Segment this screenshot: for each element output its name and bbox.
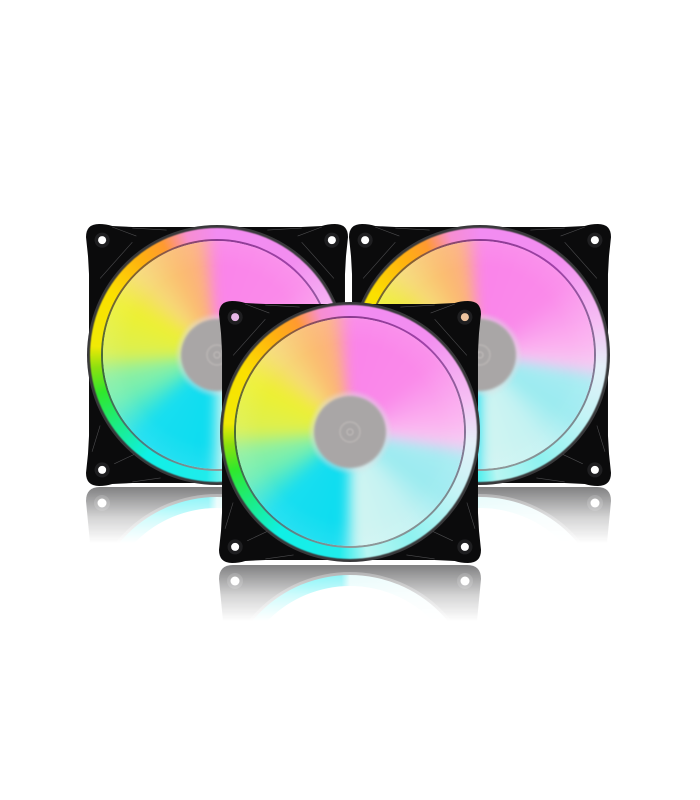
infographic: three RGB fans product image: [86, 224, 611, 616]
fan: front centre: [219, 301, 481, 563]
reflection: front fan: [219, 565, 481, 616]
reflection: back right fan: [478, 487, 611, 538]
reflection: back left fan: [86, 487, 222, 538]
fan: back right: [349, 224, 611, 486]
fan: back left: [86, 224, 348, 486]
